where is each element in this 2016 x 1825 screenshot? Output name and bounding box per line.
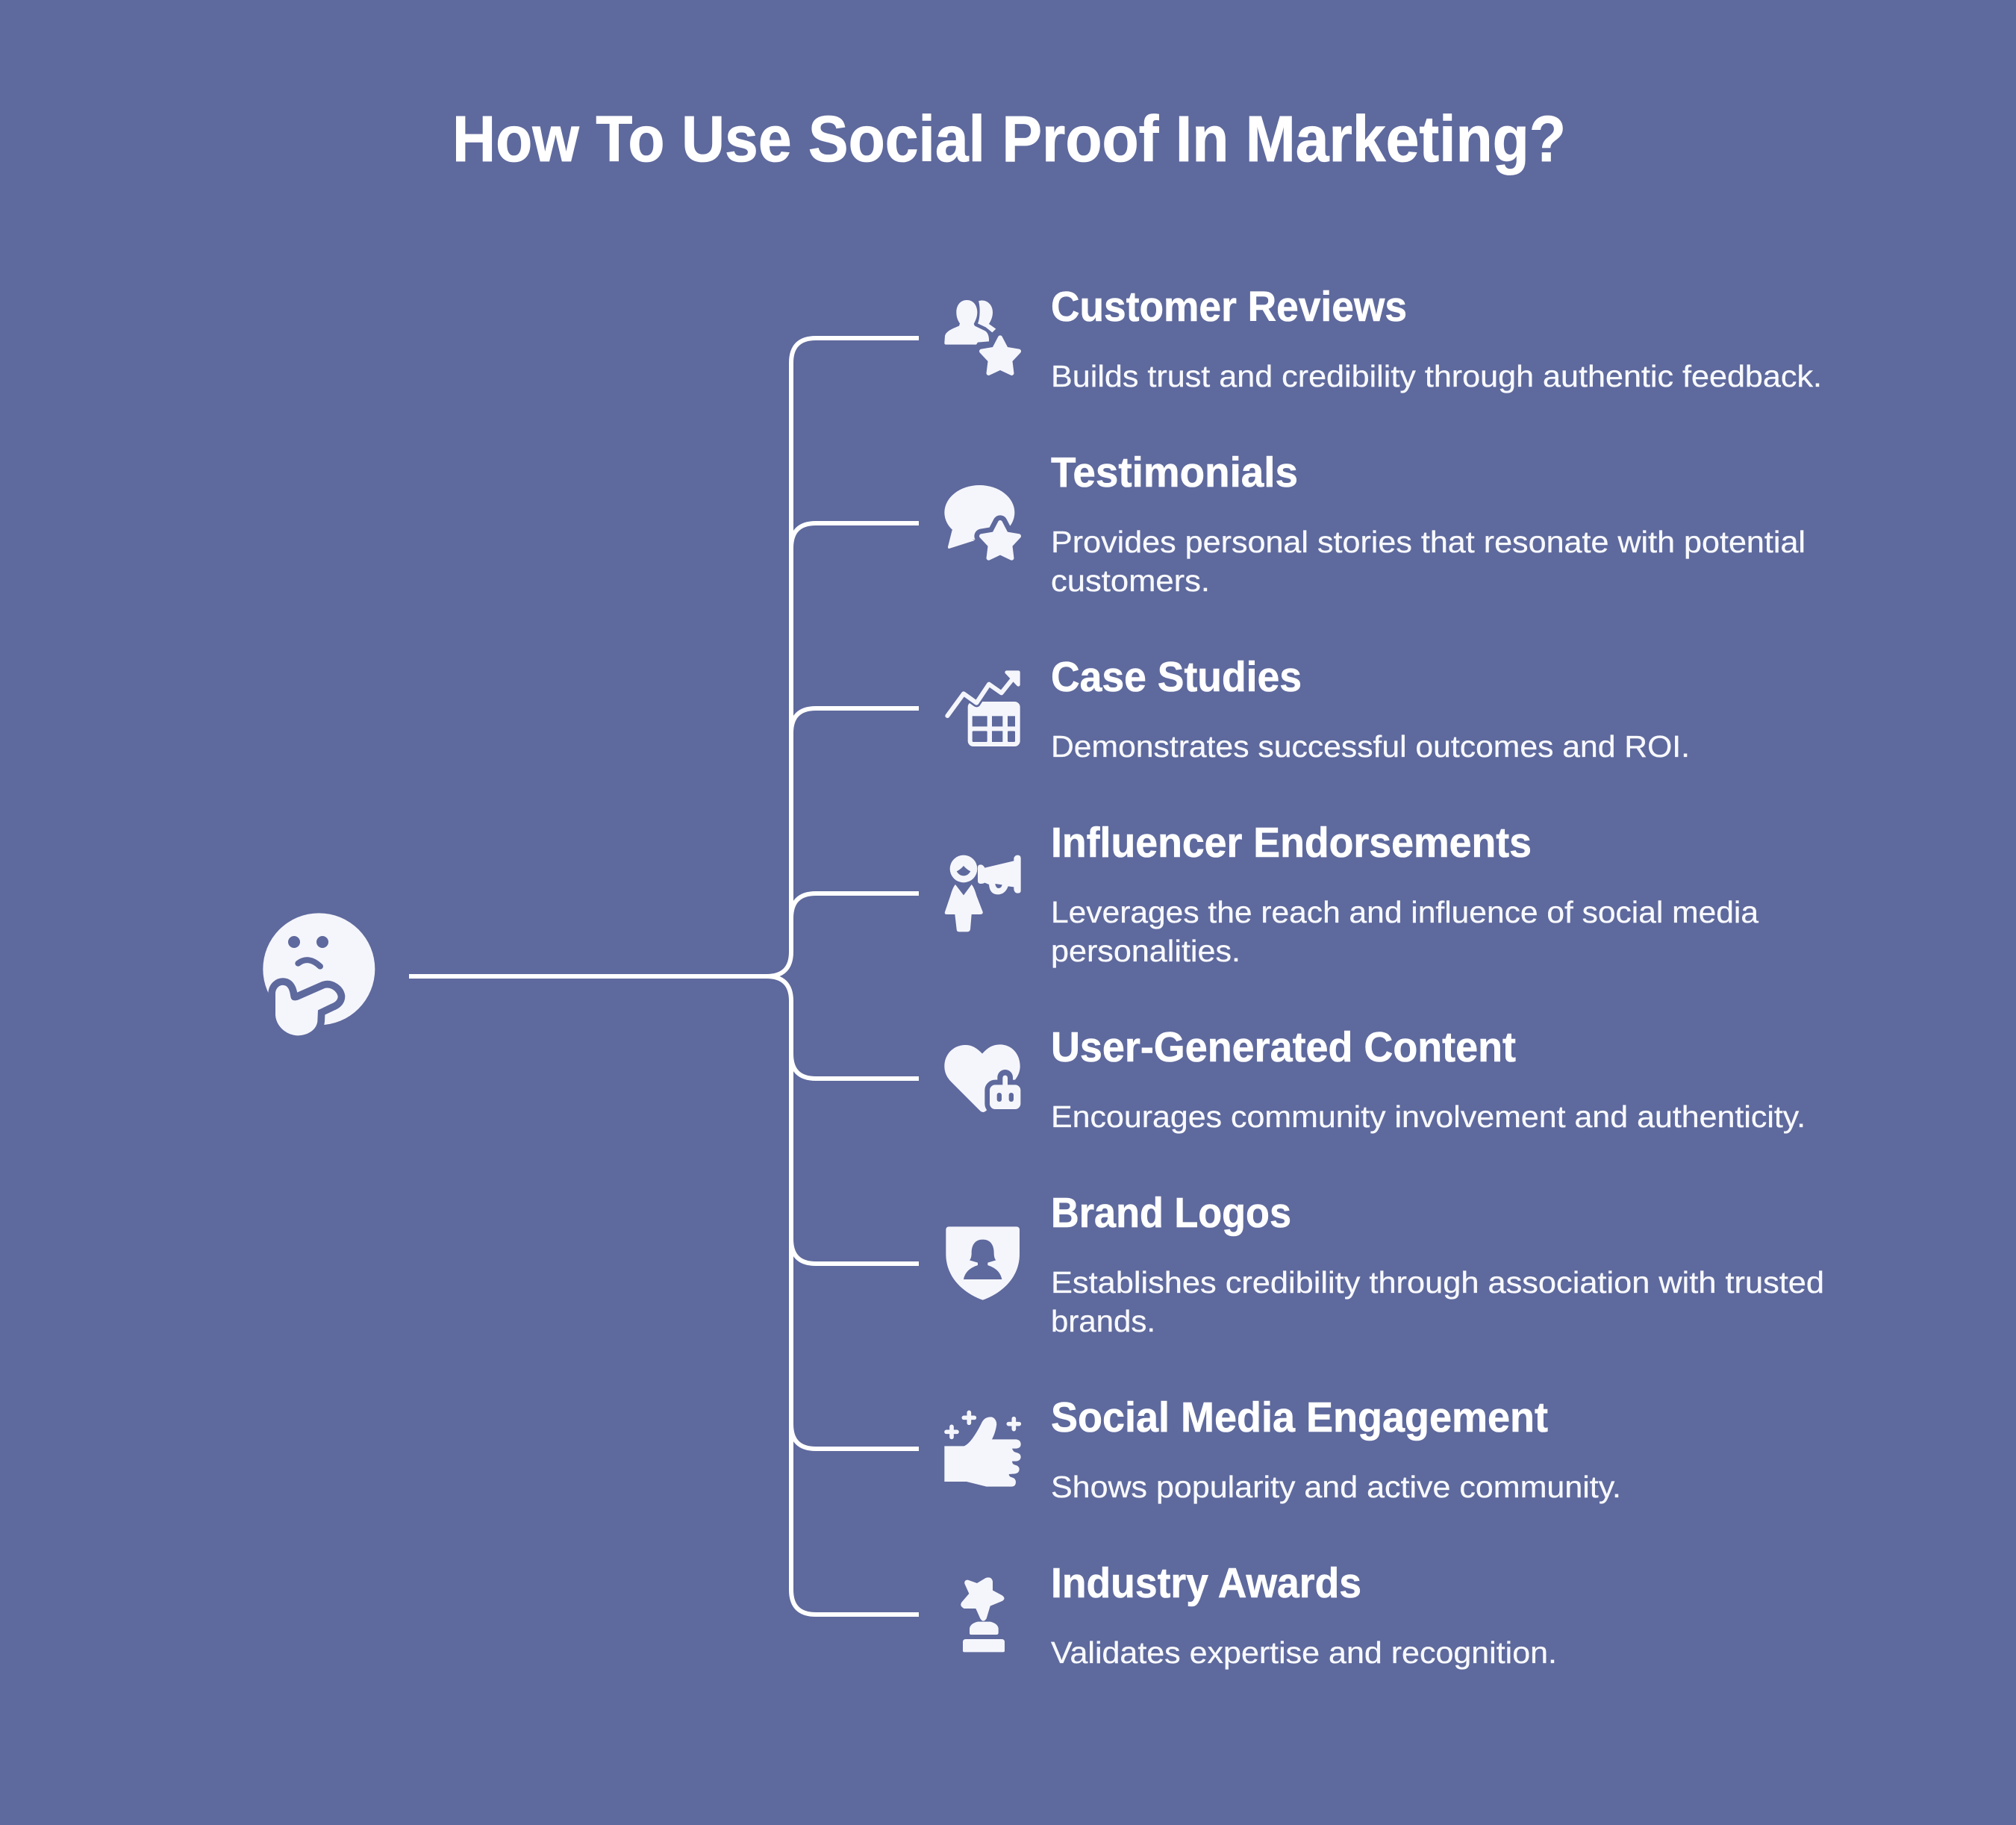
icon: thumbs up with sparkles [944, 1412, 1021, 1487]
item: Testimonials [944, 449, 1806, 598]
description: Industry Awards: Validates expertise and recognition. [1051, 1635, 1557, 1670]
icon: people with star [944, 300, 1019, 373]
item: Testimonials: customers. [1051, 564, 1210, 598]
item: Case Studies [947, 653, 1690, 764]
item: Brand Logos: brands. [1051, 1304, 1155, 1338]
title: How To Use Social Proof In Marketing? [452, 103, 1566, 175]
heading: Social Media Engagement: Social Media Engagement [1051, 1394, 1548, 1441]
description: Influencer Endorsements: Leverages the reach and influence of social media [1051, 895, 1758, 929]
heading: User-Generated Content: User-Generated Content [1051, 1023, 1516, 1071]
description: Case Studies: Demonstrates successful outcomes and ROI. [1051, 729, 1690, 764]
icon: star trophy [961, 1577, 1005, 1652]
icon: heart with robot badge [944, 1044, 1020, 1112]
icon: person with megaphone [945, 855, 1021, 932]
item: Social Media Engagement [944, 1394, 1621, 1504]
description: Social Media Engagement: Shows popularity and active community. [1051, 1470, 1621, 1504]
item: Influencer Endorsements: personalities. [1051, 934, 1241, 968]
item: Industry Awards [961, 1559, 1557, 1670]
item: Brand Logos [946, 1189, 1824, 1338]
icon: shield with person [946, 1226, 1020, 1300]
heading: Customer Reviews: Customer Reviews [1051, 283, 1407, 331]
connector tree linking the central icon to all eight items [409, 338, 919, 1615]
description: Customer Reviews: Builds trust and credibility through authentic feedback. [1051, 359, 1822, 393]
heading: Brand Logos: Brand Logos [1051, 1189, 1291, 1237]
item: Customer Reviews [944, 283, 1822, 393]
icon: speech bubble with star [944, 485, 1019, 558]
item: Influencer Endorsements [945, 819, 1758, 968]
heading: Case Studies: Case Studies [1051, 653, 1302, 701]
description: Brand Logos: Establishes credibility through association with trusted [1051, 1265, 1824, 1300]
item: User-Generated Content [944, 1023, 1806, 1134]
icon: thinking face [263, 913, 375, 1035]
heading: Industry Awards: Industry Awards [1051, 1559, 1361, 1607]
icon: rising chart with table [947, 673, 1020, 746]
heading: Testimonials: Testimonials [1051, 449, 1298, 496]
description: User-Generated Content: Encourages community involvement and authenticity. [1051, 1099, 1806, 1134]
description: Testimonials: Provides personal stories that resonate with potential [1051, 525, 1806, 559]
heading: Influencer Endorsements: Influencer Endorsements [1051, 819, 1532, 867]
